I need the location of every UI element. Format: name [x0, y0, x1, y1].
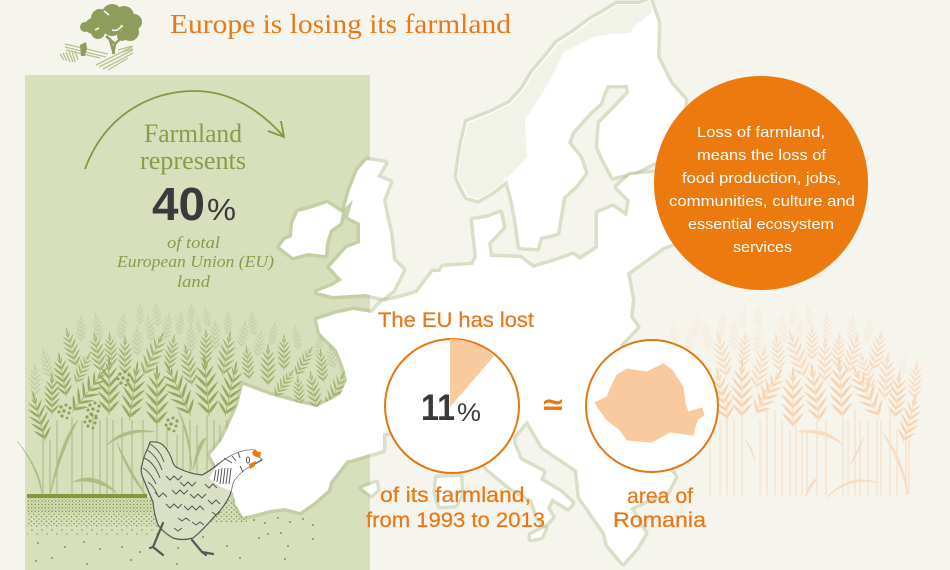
- map: mainland Europe: [210, 173, 690, 563]
- fields: [60, 44, 133, 70]
- tree crown gaps: [95, 11, 122, 30]
- wheat ears: right middle row: [709, 324, 924, 400]
- tree trunk: [106, 36, 122, 54]
- text: area of Romania: area of: [627, 484, 693, 508]
- icon: tree and fields: [60, 4, 142, 70]
- circle: [586, 340, 718, 472]
- value: 11: [421, 387, 455, 428]
- wheat stems: right: [710, 400, 909, 495]
- approximately equal sign: ≃: [541, 387, 565, 421]
- callout text: Loss of farmland,: [697, 124, 825, 141]
- wheat ears: middle row: [58, 325, 353, 412]
- wildflower clusters: [58, 370, 179, 432]
- wheat ears: right front row: [706, 355, 926, 445]
- medium dots under hen: [152, 500, 247, 522]
- hen body: [141, 442, 262, 540]
- soil: dotted ground: [27, 494, 314, 565]
- callout text: means the loss of: [697, 147, 827, 164]
- callout text: food production, jobs,: [682, 170, 841, 187]
- text: farmland represents: represents: [140, 146, 246, 175]
- map: Great Britain: [317, 160, 403, 298]
- wheat ears: front row: [23, 350, 248, 443]
- scattered dots: [35, 517, 314, 565]
- wheat ears: back row: [28, 301, 339, 396]
- wedge: [450, 339, 494, 407]
- map: Sicily: [531, 528, 545, 539]
- tree crown: [80, 4, 142, 41]
- map of Europe: [210, 0, 690, 563]
- figure: 40 percent: %: [207, 192, 236, 227]
- callout text: services: [733, 239, 792, 256]
- sparse dots: [27, 526, 162, 535]
- pie circle: 11 percent: [385, 339, 519, 473]
- text: of total EU land: land: [177, 272, 211, 291]
- panel: farmland share: [25, 75, 370, 570]
- wheat field: left: [17, 301, 353, 495]
- map: Norway (pale): [458, 1, 652, 199]
- figure: 40 percent: 40: [152, 178, 205, 230]
- arrow arc: [85, 91, 284, 169]
- callout text: [669, 124, 855, 256]
- callout text: communities, culture and: [669, 193, 855, 210]
- wheat stems: left: [43, 415, 227, 495]
- text: farmland represents: Farmland: [144, 119, 242, 148]
- hen comb: [252, 449, 261, 458]
- percent sign: %: [457, 399, 481, 427]
- hen eye: [246, 457, 250, 463]
- wheat field: right: [669, 303, 926, 498]
- map: Ireland: [280, 203, 342, 257]
- orange circle: [654, 76, 868, 290]
- text: of its farmland: from 1993 to 2013: [366, 508, 545, 532]
- circle: [385, 339, 519, 473]
- arrow head: [268, 121, 284, 137]
- wheat ears: right back row: [669, 303, 910, 377]
- text: of total EU land: [116, 233, 274, 291]
- text: area of Romania: Romania: [613, 508, 706, 532]
- illustration: hen: [141, 442, 262, 555]
- text: of total EU land: of total: [167, 233, 220, 252]
- hen legs: [150, 523, 213, 555]
- text: of its farmland: of its farmland,: [380, 483, 531, 507]
- map: Corsica and Sardinia: [436, 477, 461, 506]
- medium dots: [27, 514, 157, 526]
- title: Europe is losing its farmland: [170, 9, 512, 39]
- wheat leaves: right: [745, 382, 908, 498]
- text: the EU has lost: The EU has lost: [378, 308, 534, 332]
- text: of its farmland: [366, 483, 545, 532]
- map: Scandinavia: [457, 0, 685, 248]
- callout text: essential ecosystem: [688, 216, 834, 233]
- text: farmland represents: [140, 119, 246, 175]
- map: Balearic Islands: [362, 483, 377, 495]
- figure: 40 percent: [152, 178, 236, 230]
- Romania circle: [586, 340, 718, 472]
- wheat leaves: left: [17, 410, 206, 495]
- map: Romania: [595, 364, 704, 442]
- hen wattle: [249, 461, 256, 469]
- farmer: [80, 42, 87, 56]
- dense dots: [27, 498, 152, 514]
- hen feathers: [143, 444, 243, 531]
- callout: consequences: [654, 76, 868, 290]
- hen neck and head: [209, 450, 261, 491]
- arrow: curved: [85, 91, 284, 169]
- text: of total EU land: European Union (EU): [116, 252, 274, 271]
- text: area of Romania: [613, 484, 706, 532]
- ground line: [27, 494, 147, 498]
